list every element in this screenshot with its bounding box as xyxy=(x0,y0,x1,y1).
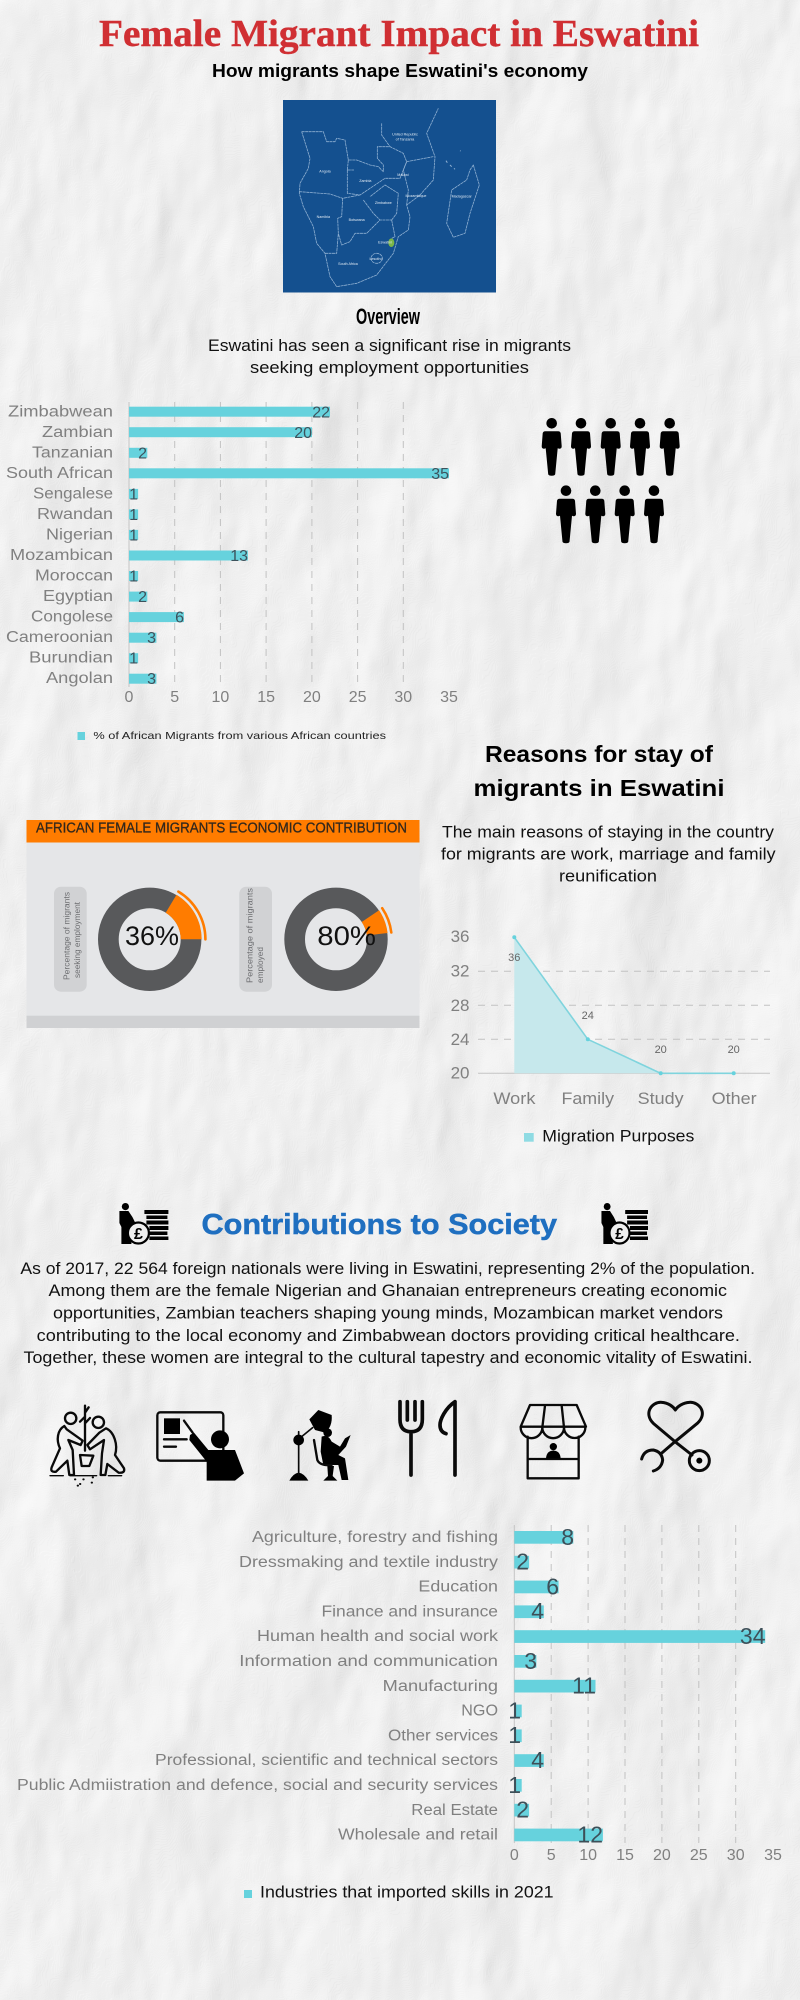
map: Eswatini highlight xyxy=(388,238,394,247)
legend: African migrants: % of African Migrants from various African countries xyxy=(93,730,386,742)
map: country names: Botswana xyxy=(349,218,366,222)
label pill: seeking employment: seeking employment xyxy=(72,901,82,978)
x axis ticks: 35 xyxy=(764,1847,782,1864)
heading: contributions to society: Contributions to Society xyxy=(202,1209,557,1241)
category labels: Egyptian xyxy=(43,588,113,605)
category labels: South African xyxy=(6,465,113,482)
label pill: employed xyxy=(239,887,272,992)
map: country names xyxy=(317,132,473,266)
map: country names: Malawi xyxy=(397,173,409,177)
map: country names: Namibia xyxy=(317,215,331,219)
category labels: Public Admiistration and defence, social and security services xyxy=(17,1777,498,1794)
value labels: 1 xyxy=(129,650,138,668)
value labels: 6 xyxy=(175,610,184,626)
area fill xyxy=(514,937,661,1073)
text: contributions paragraph: As of 2017, 22 564 foreign nationals were living in Eswatini, representing 2% of the population. xyxy=(20,1259,755,1278)
x axis labels: Study xyxy=(638,1089,684,1108)
icon: person with coins and pound sign, right xyxy=(601,1203,648,1244)
x axis ticks: 10 xyxy=(212,689,229,706)
x axis ticks xyxy=(510,1847,782,1864)
text: contributions paragraph xyxy=(20,1259,755,1367)
icon: person with coins and pound sign, left xyxy=(119,1203,168,1244)
trend line xyxy=(514,937,734,1073)
overview text xyxy=(208,336,571,377)
title: Female Migrant Impact in Eswatini xyxy=(99,13,699,55)
value labels: 4 xyxy=(531,1598,544,1624)
text: reasons for staying: The main reasons of staying in the country xyxy=(442,823,775,842)
category labels: Manufacturing xyxy=(383,1678,498,1695)
map: country names: Zimbabwe xyxy=(375,201,392,205)
x axis ticks: 20 xyxy=(653,1847,671,1864)
x axis labels: Other xyxy=(712,1089,757,1108)
y axis labels: 28 xyxy=(451,996,470,1015)
value labels: 20 xyxy=(294,425,312,442)
overview heading: Overview xyxy=(356,304,421,329)
category labels: Finance and insurance xyxy=(322,1603,498,1620)
text: contributions paragraph: contributing to the local economy and Zimbabwean doctors providing critical healthcare. xyxy=(37,1326,740,1345)
category labels: Wholesale and retail xyxy=(338,1827,498,1844)
map: country names: Eswatini xyxy=(378,240,392,244)
x axis ticks xyxy=(125,689,458,706)
overview text: seeking employment opportunities xyxy=(250,358,529,377)
value labels: 1 xyxy=(129,528,138,544)
text: reasons for staying: reunification xyxy=(559,867,657,886)
value labels: 3 xyxy=(147,630,156,647)
icon: stethoscope forming a heart xyxy=(642,1402,709,1471)
value labels: 22 xyxy=(312,404,330,422)
bar chart: African migrants by nationality xyxy=(6,402,458,706)
value labels: 1 xyxy=(508,1772,521,1798)
value labels: 4 xyxy=(531,1747,544,1773)
heading: reasons for stay xyxy=(474,741,724,801)
text: contributions paragraph: Among them are the female Nigerian and Ghanaian entrepreneurs creating economic xyxy=(48,1281,728,1300)
text: contributions paragraph: Together, these women are integral to the cultural tapestry and economic vitality of Eswatini. xyxy=(24,1348,752,1367)
icon: fork and knife xyxy=(400,1402,455,1475)
value labels: 11 xyxy=(572,1672,596,1698)
x axis ticks: 0 xyxy=(125,689,134,706)
map: country names: United Republic xyxy=(392,132,418,136)
value labels: 3 xyxy=(147,671,156,688)
icon: market stall with vendor xyxy=(521,1405,586,1478)
y axis labels: 24 xyxy=(451,1030,470,1049)
heading: reasons for stay: migrants in Eswatini xyxy=(474,775,724,801)
x axis ticks: 5 xyxy=(170,689,179,706)
map: country names: Angola xyxy=(319,170,332,174)
value labels: 1 xyxy=(129,507,138,524)
bars xyxy=(514,1531,765,1841)
category labels: Agriculture, forestry and fishing xyxy=(252,1529,498,1546)
legend: migration purposes: Migration Purposes xyxy=(542,1127,694,1146)
x axis ticks: 15 xyxy=(257,689,275,706)
x axis labels xyxy=(493,1089,757,1108)
value labels: 34 xyxy=(740,1623,766,1649)
donut: 36% xyxy=(108,892,205,981)
category labels: NGO xyxy=(461,1703,498,1720)
x axis ticks: 30 xyxy=(727,1847,745,1864)
value labels: 13 xyxy=(230,548,248,565)
x axis labels: Work xyxy=(493,1089,536,1108)
value labels: 36 xyxy=(508,952,520,964)
bars xyxy=(129,407,449,684)
value labels: 2 xyxy=(516,1796,529,1822)
y axis labels: 20 xyxy=(451,1064,470,1082)
y axis labels: 36 xyxy=(451,927,470,946)
x axis ticks: 25 xyxy=(349,689,367,706)
text: reasons for staying: for migrants are work, marriage and family xyxy=(441,845,776,864)
value labels: 12 xyxy=(577,1822,603,1848)
value labels: 1 xyxy=(508,1722,521,1748)
category labels: Congolese xyxy=(31,608,113,626)
icon: two people planting a tree xyxy=(50,1406,124,1486)
panel: economic contribution donuts xyxy=(26,820,420,1028)
value labels: 6 xyxy=(546,1574,559,1600)
label pill: employed: employed xyxy=(255,947,265,983)
icon: person with coins and pound sign, right: £ xyxy=(615,1226,624,1243)
value labels: 2 xyxy=(138,446,147,462)
y axis labels xyxy=(451,927,470,1082)
category labels: Zambian xyxy=(42,424,113,441)
category labels: Angolan xyxy=(46,670,113,687)
category labels: Zimbabwean xyxy=(8,404,113,420)
bar chart: industries that imported skills xyxy=(17,1524,782,1864)
label pill: seeking employment: Percentage of migrants xyxy=(62,892,72,980)
label pill: seeking employment xyxy=(54,887,87,992)
value labels: 24 xyxy=(582,1010,594,1022)
value labels xyxy=(508,1524,766,1848)
category labels: Burundian xyxy=(29,650,113,666)
category labels: Sengalese xyxy=(33,486,113,502)
x axis ticks: 5 xyxy=(547,1847,556,1864)
donut: 80%: 80% xyxy=(317,921,376,951)
map: country borders xyxy=(299,108,479,287)
value labels: 1 xyxy=(508,1698,521,1724)
data points xyxy=(512,935,736,1075)
label pill: employed: Percentage of migrants xyxy=(244,888,254,983)
x axis ticks: 20 xyxy=(303,689,321,706)
map of southern Africa with Eswatini highlighted xyxy=(283,100,496,292)
value labels xyxy=(129,404,449,688)
panel title: AFRICAN FEMALE MIGRANTS ECONOMIC CONTRIBUTION xyxy=(36,820,407,836)
x axis ticks: 10 xyxy=(579,1847,597,1864)
heading: reasons for stay: Reasons for stay of xyxy=(485,741,713,767)
x axis ticks: 25 xyxy=(690,1847,708,1864)
x axis ticks: 0 xyxy=(510,1847,519,1864)
area chart: migration purposes xyxy=(451,927,770,1108)
category labels xyxy=(6,404,113,687)
text: reasons for staying xyxy=(441,823,776,886)
category labels: Rwandan xyxy=(37,506,113,523)
value labels: 2 xyxy=(516,1548,529,1574)
value labels: 2 xyxy=(138,589,147,606)
category labels: Education xyxy=(418,1579,498,1596)
category labels: Real Estate xyxy=(411,1802,498,1819)
donut: 80% xyxy=(295,898,391,981)
category labels: Tanzanian xyxy=(32,444,113,462)
category labels: Moroccan xyxy=(35,568,113,584)
x axis ticks: 15 xyxy=(616,1847,634,1864)
category labels: Information and communication xyxy=(239,1653,498,1670)
text: contributions paragraph: opportunities, Zambian teachers shaping young minds, Mozambican market vendors xyxy=(53,1304,723,1323)
map: country names: of Tanzania xyxy=(396,138,415,142)
subtitle: How migrants shape Eswatini's economy xyxy=(212,60,589,81)
overview text: Eswatini has seen a significant rise in migrants xyxy=(208,336,571,355)
x axis ticks: 35 xyxy=(440,689,458,706)
legend: industries: Industries that imported skills in 2021 xyxy=(260,1883,554,1902)
map: country names: Zambia xyxy=(359,179,372,183)
category labels: Human health and social work xyxy=(257,1628,498,1645)
map: country names: Madagascar xyxy=(452,195,473,199)
icon: woman under a salon hair dryer xyxy=(289,1410,351,1481)
value labels: 8 xyxy=(561,1524,574,1550)
category labels: Nigerian xyxy=(46,526,113,544)
map: country names: Lesotho xyxy=(369,257,383,261)
category labels xyxy=(17,1529,498,1844)
value labels xyxy=(508,952,740,1056)
value labels: 35 xyxy=(431,466,449,483)
category labels: Cameroonian xyxy=(6,629,113,646)
icon: person with coins and pound sign, left: £ xyxy=(134,1226,143,1243)
y axis labels: 32 xyxy=(451,962,470,980)
x axis ticks: 30 xyxy=(394,689,412,706)
category labels: Dressmaking and textile industry xyxy=(239,1554,498,1571)
x axis labels: Family xyxy=(562,1089,615,1108)
icon: teacher at a board xyxy=(157,1412,244,1481)
value labels: 20 xyxy=(655,1044,667,1056)
map: country names: Mozambique xyxy=(406,194,426,198)
value labels: 3 xyxy=(524,1648,537,1674)
icon: group of nine people xyxy=(542,418,680,543)
category labels: Professional, scientific and technical sectors xyxy=(155,1752,498,1769)
value labels: 1 xyxy=(129,568,138,586)
map: country names: South Africa xyxy=(338,262,359,266)
value labels: 20 xyxy=(728,1044,740,1056)
donut: 36%: 36% xyxy=(125,921,179,951)
category labels: Other services xyxy=(388,1727,498,1744)
category labels: Mozambican xyxy=(10,547,113,564)
value labels: 1 xyxy=(129,486,138,504)
